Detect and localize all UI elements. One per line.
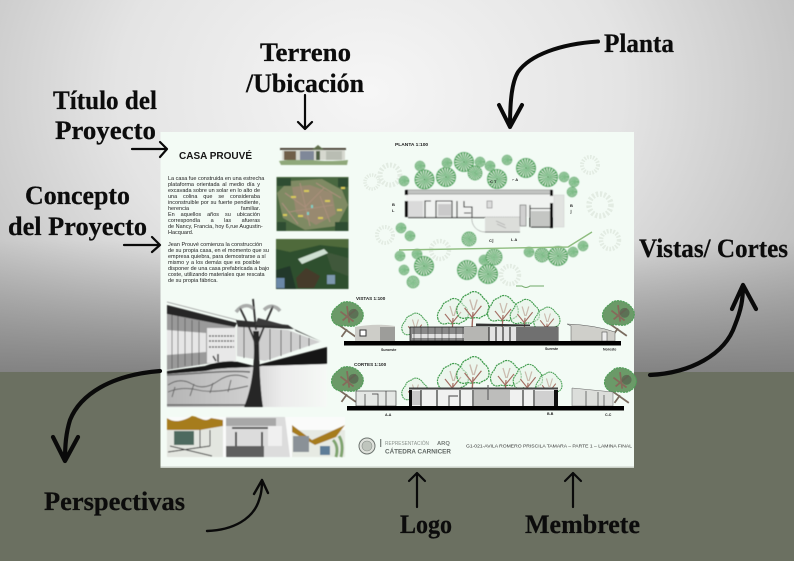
text block: concept paragraph 1: plataforma orientada al medio día y (168, 182, 260, 188)
heading: Planta: Planta (604, 29, 674, 58)
floor (0, 372, 794, 561)
heading: Título del Proyecto: Proyecto (55, 116, 156, 145)
roof left (167, 305, 237, 327)
facade (167, 314, 235, 370)
view labels (381, 347, 616, 352)
title block text: G1-021-AVILA ROMERO PRISCILA TAMARA – PARTE 1 – LAMINA FINAL (466, 444, 632, 448)
image: site satellite close-up (276, 239, 348, 289)
text block: concept paragraph 1: una colina que se consideraba (168, 194, 260, 200)
ground line (344, 341, 621, 346)
glazing right (237, 326, 320, 361)
plan: north and scale mark (516, 286, 544, 288)
plan title: PLANTA 1:100 (395, 142, 428, 148)
text block: concept paragraph 1: Hacquard. (168, 230, 193, 236)
section labels: B-B (547, 412, 554, 416)
text block: concept paragraph 2 (168, 242, 269, 284)
arrow: Concepto to paragraph (124, 237, 160, 252)
text block: concept paragraph 2: mismo y a los demás que es posible (168, 260, 260, 266)
arrow: Membrete up (565, 473, 581, 507)
heading: Terreno / Ubicación (245, 38, 365, 98)
text block: concept paragraph 2: de su propia fábrica. (168, 278, 218, 284)
black floor (167, 347, 327, 374)
view labels: Sureste (545, 347, 558, 351)
section right (572, 388, 613, 406)
heading: Logo: Logo (400, 510, 452, 539)
heading: Concepto del Proyecto: del Proyecto (8, 212, 147, 241)
tree (244, 331, 263, 407)
panel: presentation sheet (160, 132, 636, 468)
logo: CÁTEDRA CARNICER (385, 448, 452, 456)
text block: concept paragraph 1: herencia familiar. (168, 206, 260, 212)
text block: concept paragraph 2: disponer de una casa prefabricada a bajo (168, 266, 269, 272)
text block: concept paragraph 1: excavada sobre un solar en lo alto de (168, 188, 260, 194)
text block: concept paragraph 2: empresa quiebra, para demostrarse a sí (168, 254, 266, 260)
main volume (410, 324, 558, 341)
text block: concept paragraph 1: correspondía a las afueras (168, 218, 260, 224)
heading: Título del Proyecto: Título del (53, 86, 157, 115)
roof right (236, 320, 294, 329)
floor plan with trees (365, 152, 619, 288)
text block: concept paragraph 1: inconstruible por su fuerte pendiente, (168, 200, 260, 206)
section labels: C-C (605, 413, 612, 417)
wall shading near floor (0, 240, 794, 373)
view labels: Suroeste (381, 348, 396, 352)
plan: section markers: L (392, 208, 395, 213)
plan: surrounding trees (395, 152, 588, 288)
text block: concept paragraph 1: En aquellos años su ubicación (168, 212, 260, 218)
arrow: perspective curve (53, 371, 160, 461)
left pavilion (355, 325, 395, 341)
arrow: Logo up (409, 473, 425, 507)
perspectives strip (167, 416, 345, 457)
arrow: Título to sheet title (132, 142, 167, 157)
heading: Título del Proyecto (53, 86, 157, 145)
view labels: Noreste (603, 348, 616, 352)
heading: Concepto del Proyecto (8, 181, 147, 241)
heading: Concepto del Proyecto: Concepto (25, 181, 130, 210)
plan: section markers: ⌋ (570, 209, 572, 214)
text block: concept paragraph 1 (168, 176, 264, 236)
logo: REPRESENTACIÓN (385, 440, 429, 447)
plan: section markers: ⌐ A (512, 177, 518, 182)
logo: ARQ (437, 441, 450, 447)
text block: concept paragraph 2: de su propia casa, en el momento que su (168, 248, 269, 254)
project title on sheet: CASA PROUVÉ (179, 149, 252, 162)
plan: garden path line (399, 232, 592, 250)
perspective drawing (167, 299, 327, 407)
plan: section markers: B (392, 202, 395, 207)
plan: faint ghost trees (365, 157, 619, 284)
plan: section markers: C⌋ (489, 238, 494, 243)
image: site elevation thumbnail (279, 145, 348, 165)
plan: section markers: C T (490, 179, 497, 184)
section left (356, 391, 396, 406)
text block: concept paragraph 1: La casa fue construida en una estrecha (168, 176, 264, 182)
section main (409, 385, 558, 406)
heading: Vistas / Cortes: Vistas/ Cortes (639, 234, 788, 263)
right pavilion (567, 324, 615, 341)
elevation drawings (331, 292, 634, 352)
plan: section markers: B (570, 203, 573, 208)
heading: Terreno / Ubicación: Terreno (260, 38, 351, 67)
heading: Perspectivas: Perspectivas (44, 487, 185, 516)
text block: concept paragraph 1: de Nancy, Francia, hoy 6,rue Augustin- (168, 224, 263, 230)
vistas title: VISTAS 1:100 (356, 296, 386, 301)
plan: section markers (392, 177, 573, 243)
arrow: Vistas curve (650, 285, 756, 375)
section labels: A-A (385, 413, 392, 417)
plan: section markers: L A (511, 237, 517, 242)
ground line (347, 406, 624, 410)
arrow: Perspectivas curve (207, 480, 268, 531)
heading: Membrete: Membrete (525, 510, 640, 539)
image: city satellite map (276, 177, 348, 231)
background wall (0, 0, 794, 373)
section drawings (331, 357, 636, 417)
text block: concept paragraph 2: coste, utilizando materiales que rescata (168, 272, 265, 278)
arrow: Terreno to thumbnail (298, 95, 312, 129)
cortes title: CORTES 1:100 (354, 362, 387, 367)
arrow: Planta curve (499, 42, 598, 127)
heading: Terreno / Ubicación: /Ubicación (245, 69, 365, 98)
text block: concept paragraph 2: Jean Prouvé comienza la construcción (168, 242, 262, 248)
plan: house outline (405, 190, 564, 232)
section labels (385, 412, 612, 417)
logo (359, 438, 452, 456)
